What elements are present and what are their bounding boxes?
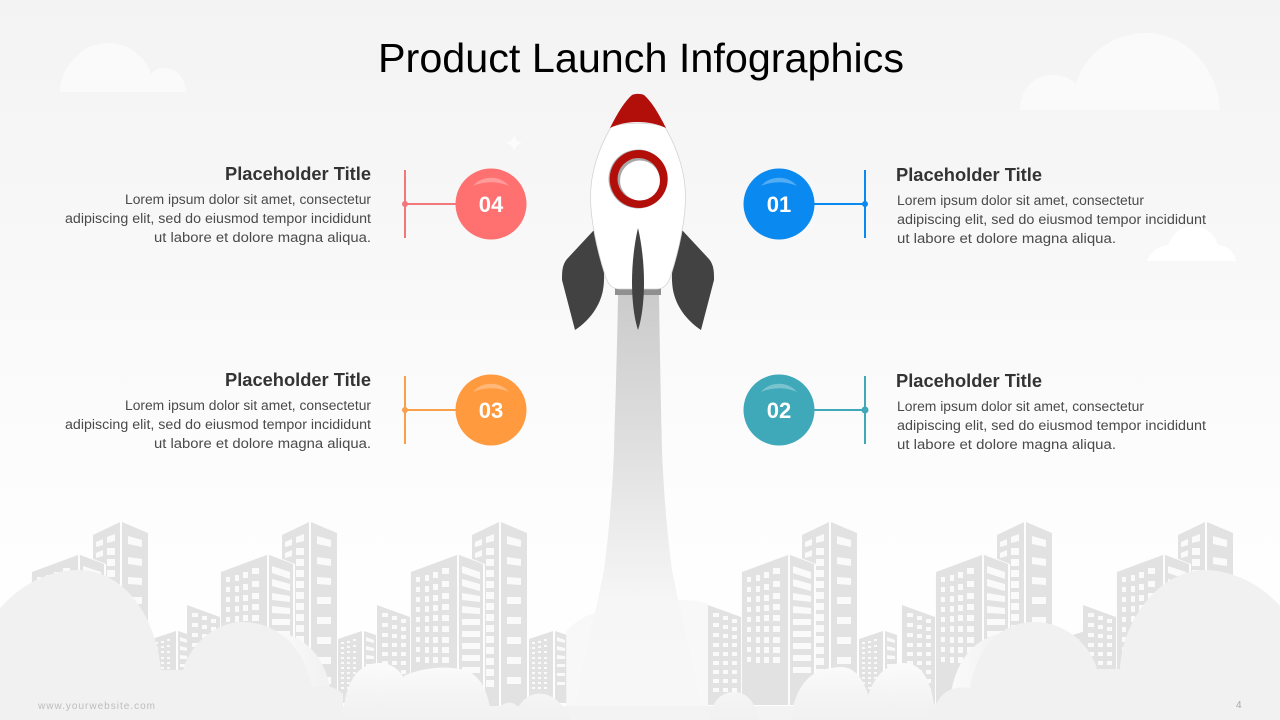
text 01: adipiscing elit, sed do eiusmod tempor incididunt bbox=[897, 212, 1206, 227]
badge 01: 01 bbox=[767, 192, 791, 217]
rocket bbox=[562, 94, 714, 330]
text 02: Placeholder Title bbox=[896, 371, 1042, 391]
text 03: ut labore et dolore magna aliqua. bbox=[154, 436, 371, 451]
text 02 bbox=[896, 371, 1206, 452]
rocket nose cone bbox=[610, 94, 666, 128]
text 04: adipiscing elit, sed do eiusmod tempor incididunt bbox=[65, 211, 371, 226]
text 04: Placeholder Title bbox=[225, 164, 371, 184]
item 02 bbox=[744, 371, 1206, 452]
cloud: top right bbox=[1020, 33, 1220, 110]
cloud: soft bumps left bbox=[343, 663, 571, 720]
cloud: back left bbox=[270, 631, 331, 720]
connector 01 bbox=[812, 170, 868, 238]
connector 04 bbox=[402, 170, 458, 238]
ground strip bbox=[0, 706, 1280, 720]
badge 01 bbox=[744, 168, 814, 240]
cloud: soft bumps right bbox=[709, 663, 936, 720]
item 01 bbox=[744, 165, 1206, 246]
text 04 bbox=[65, 164, 372, 245]
text 03 bbox=[65, 370, 372, 451]
badge 04 bbox=[456, 168, 526, 240]
connector 03 bbox=[402, 376, 458, 444]
text 03: Lorem ipsum dolor sit amet, consectetur bbox=[125, 398, 372, 413]
page number: 4 bbox=[1236, 700, 1242, 711]
text 01 bbox=[896, 165, 1206, 246]
item 03 bbox=[65, 370, 526, 451]
rocket nozzle bbox=[615, 288, 661, 295]
cloud: big left bbox=[0, 570, 343, 720]
text 02: adipiscing elit, sed do eiusmod tempor incididunt bbox=[897, 418, 1206, 433]
badge 03: 03 bbox=[479, 398, 503, 423]
rocket centre fin bbox=[632, 228, 644, 330]
badge 03 bbox=[456, 374, 526, 446]
badge 02 bbox=[744, 374, 814, 446]
rocket exhaust trail bbox=[572, 295, 704, 720]
badge 04: 04 bbox=[479, 192, 504, 217]
item 04 bbox=[65, 164, 526, 245]
cloud: right group bbox=[930, 570, 1280, 720]
rocket window bbox=[608, 150, 668, 208]
text 02: Lorem ipsum dolor sit amet, consectetur bbox=[897, 399, 1145, 414]
text 03: adipiscing elit, sed do eiusmod tempor incididunt bbox=[65, 417, 371, 432]
cloud: back right bbox=[948, 633, 1002, 720]
cloud: right middle bbox=[1147, 226, 1236, 261]
text 04: Lorem ipsum dolor sit amet, consectetur bbox=[125, 192, 372, 207]
connector 02 bbox=[812, 376, 868, 444]
city skyline bbox=[31, 522, 1233, 707]
cloud: centre bbox=[566, 600, 708, 720]
title: Product Launch Infographics bbox=[378, 35, 904, 81]
clouds: ground layer bbox=[0, 570, 1280, 720]
text 02: ut labore et dolore magna aliqua. bbox=[897, 437, 1116, 452]
cloud: top left bbox=[60, 43, 186, 92]
badge 02: 02 bbox=[767, 398, 791, 423]
text 01: Placeholder Title bbox=[896, 165, 1042, 185]
text 04: ut labore et dolore magna aliqua. bbox=[154, 230, 371, 245]
text 03: Placeholder Title bbox=[225, 370, 371, 390]
text 01: ut labore et dolore magna aliqua. bbox=[897, 231, 1116, 246]
text 01: Lorem ipsum dolor sit amet, consectetur bbox=[897, 193, 1145, 208]
rocket right fin bbox=[672, 230, 714, 330]
icon: sparkle star bbox=[505, 134, 523, 152]
footer website: www.yourwebsite.com bbox=[37, 701, 155, 712]
rocket body bbox=[590, 123, 686, 289]
rocket left fin bbox=[562, 230, 604, 330]
